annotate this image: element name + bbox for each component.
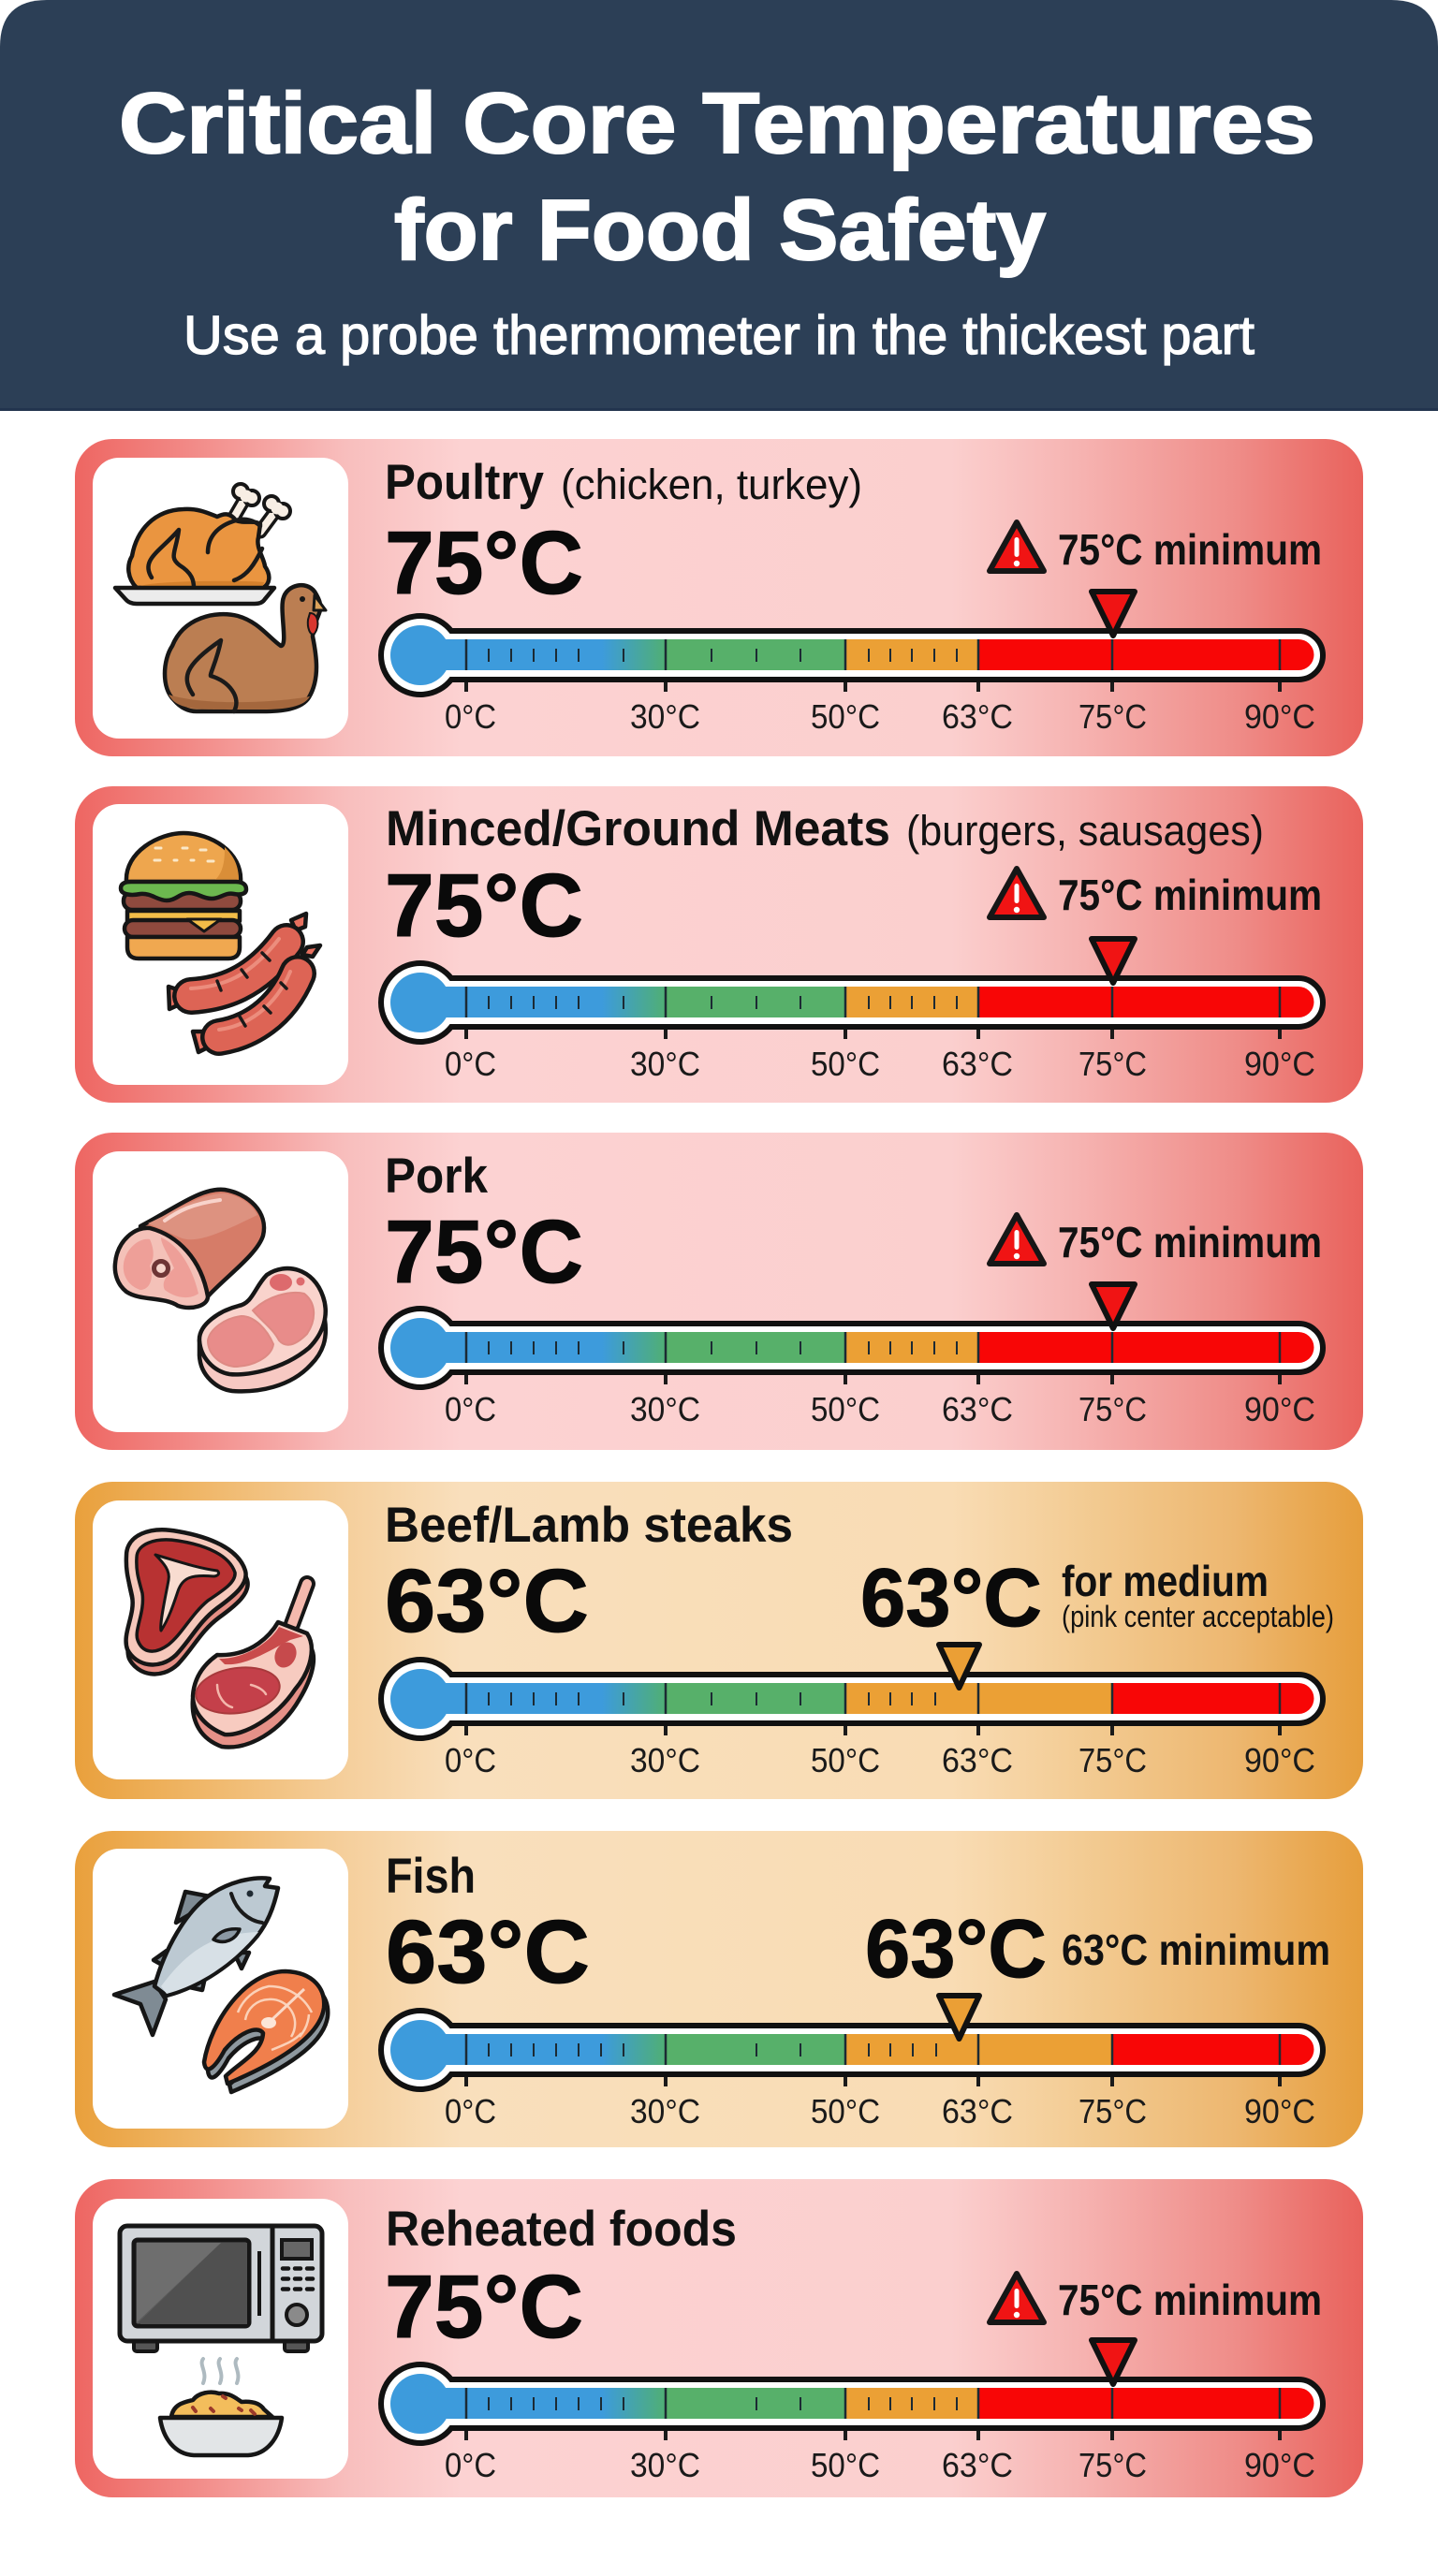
text: minimum note: 75°C minimum xyxy=(1058,2276,1322,2324)
heading: pork: Pork xyxy=(385,1149,488,1204)
callout: temperature for medium xyxy=(860,1551,1334,1644)
thermometer gauge: 90°C xyxy=(1244,2446,1315,2484)
thermometer gauge: 75°C xyxy=(1078,2092,1147,2130)
heading: poultry: Poultry xyxy=(385,455,544,510)
icon: warning triangle xyxy=(990,1215,1044,1264)
temperature value: 63°C xyxy=(385,1551,589,1651)
callout: temperature for medium: (pink center acceptable) xyxy=(1062,1600,1334,1633)
header band xyxy=(0,0,1438,411)
thermometer gauge: 90°C xyxy=(1244,1390,1315,1428)
text: poultry examples: (chicken, turkey) xyxy=(561,461,862,508)
title xyxy=(119,76,1315,278)
heading: beef and lamb steaks: Beef/Lamb steaks xyxy=(385,1498,793,1553)
subtitle: Use a probe thermometer in the thickest part xyxy=(183,305,1255,366)
text: minimum note: 75°C minimum xyxy=(1058,525,1322,574)
thermometer gauge: 90°C xyxy=(1244,2092,1315,2130)
thermometer gauge: 30°C xyxy=(630,2092,700,2130)
icon: burger and sausages xyxy=(121,833,320,1052)
thermometer gauge: 0°C xyxy=(445,1741,496,1779)
thermometer gauge: 30°C xyxy=(630,1045,700,1083)
callout: temperature for medium: 63°C xyxy=(860,1551,1042,1644)
title: Critical Core Temperatures xyxy=(119,76,1315,171)
panel: poultry xyxy=(75,439,1363,756)
thermometer gauge: 63°C xyxy=(942,1390,1013,1428)
thermometer gauge: 50°C xyxy=(811,697,880,736)
thermometer gauge xyxy=(381,1996,1323,2130)
thermometer gauge: 63°C xyxy=(942,1741,1013,1779)
text: minced meat examples: (burgers, sausages) xyxy=(906,807,1264,855)
thermometer gauge: 90°C xyxy=(1244,1741,1315,1779)
thermometer gauge: 75°C xyxy=(1078,1390,1147,1428)
heading: reheated foods: Reheated foods xyxy=(386,2202,737,2257)
thermometer gauge xyxy=(381,1645,1323,1779)
temperature value: 75°C xyxy=(385,513,583,613)
icon: pork roast and chop xyxy=(115,1190,326,1391)
text: minimum note: 75°C minimum xyxy=(1058,871,1322,919)
thermometer gauge: 63°C xyxy=(942,2446,1013,2484)
thermometer gauge: 90°C xyxy=(1244,1045,1315,1083)
thermometer gauge xyxy=(381,1284,1323,1428)
thermometer gauge xyxy=(381,592,1323,736)
temperature value: 75°C xyxy=(385,856,583,956)
thermometer gauge: 30°C xyxy=(630,697,700,736)
thermometer gauge: 75°C xyxy=(1078,697,1147,736)
thermometer gauge: 63°C xyxy=(942,697,1013,736)
thermometer gauge: 75°C xyxy=(1078,1045,1147,1083)
thermometer gauge: 30°C xyxy=(630,2446,700,2484)
thermometer gauge: 30°C xyxy=(630,1390,700,1428)
icon: warning triangle xyxy=(990,869,1044,917)
icon: t-bone steak and lamb chop xyxy=(126,1530,314,1748)
temperature value: 75°C xyxy=(385,2257,583,2357)
title: for Food Safety xyxy=(394,183,1046,278)
thermometer gauge: 50°C xyxy=(811,2092,880,2130)
icon: warning triangle xyxy=(990,2274,1044,2322)
thermometer gauge: 30°C xyxy=(630,1741,700,1779)
thermometer gauge: 50°C xyxy=(811,1741,880,1779)
callout: temperature for medium: for medium xyxy=(1062,1557,1269,1605)
thermometer gauge: 63°C xyxy=(942,1045,1013,1083)
text: minimum note: 75°C minimum xyxy=(1058,1218,1322,1266)
icon: warning triangle xyxy=(990,522,1044,571)
callout: fish minimum: 63°C minimum xyxy=(1062,1925,1330,1974)
callout: fish minimum xyxy=(865,1902,1330,1995)
heading: minced and ground meats: Minced/Ground Meats xyxy=(386,801,890,856)
thermometer gauge: 50°C xyxy=(811,1390,880,1428)
thermometer gauge: 0°C xyxy=(445,2446,496,2484)
icon: roast chicken and turkey xyxy=(115,484,326,711)
icon: microwave and bowl xyxy=(120,2226,322,2455)
thermometer gauge: 0°C xyxy=(445,1390,496,1428)
temperature value: 75°C xyxy=(385,1202,583,1302)
panel: minced and ground meats xyxy=(75,786,1363,1103)
temperature value: 63°C xyxy=(386,1902,590,2002)
icon: fish and salmon steak xyxy=(114,1878,328,2092)
thermometer gauge: 75°C xyxy=(1078,1741,1147,1779)
callout: fish minimum: 63°C xyxy=(865,1902,1047,1995)
thermometer gauge: 0°C xyxy=(445,2092,496,2130)
panel: pork xyxy=(75,1133,1363,1450)
thermometer gauge: 50°C xyxy=(811,1045,880,1083)
panel: beef and lamb steaks xyxy=(75,1482,1363,1799)
panel: fish xyxy=(75,1831,1363,2147)
thermometer gauge: 0°C xyxy=(445,697,496,736)
panel: reheated foods xyxy=(75,2179,1363,2497)
heading: fish: Fish xyxy=(386,1849,476,1904)
thermometer gauge xyxy=(381,939,1323,1083)
thermometer gauge: 90°C xyxy=(1244,697,1315,736)
thermometer gauge: 0°C xyxy=(445,1045,496,1083)
thermometer gauge: 75°C xyxy=(1078,2446,1147,2484)
thermometer gauge xyxy=(381,2340,1323,2484)
thermometer gauge: 63°C xyxy=(942,2092,1013,2130)
thermometer gauge: 50°C xyxy=(811,2446,880,2484)
